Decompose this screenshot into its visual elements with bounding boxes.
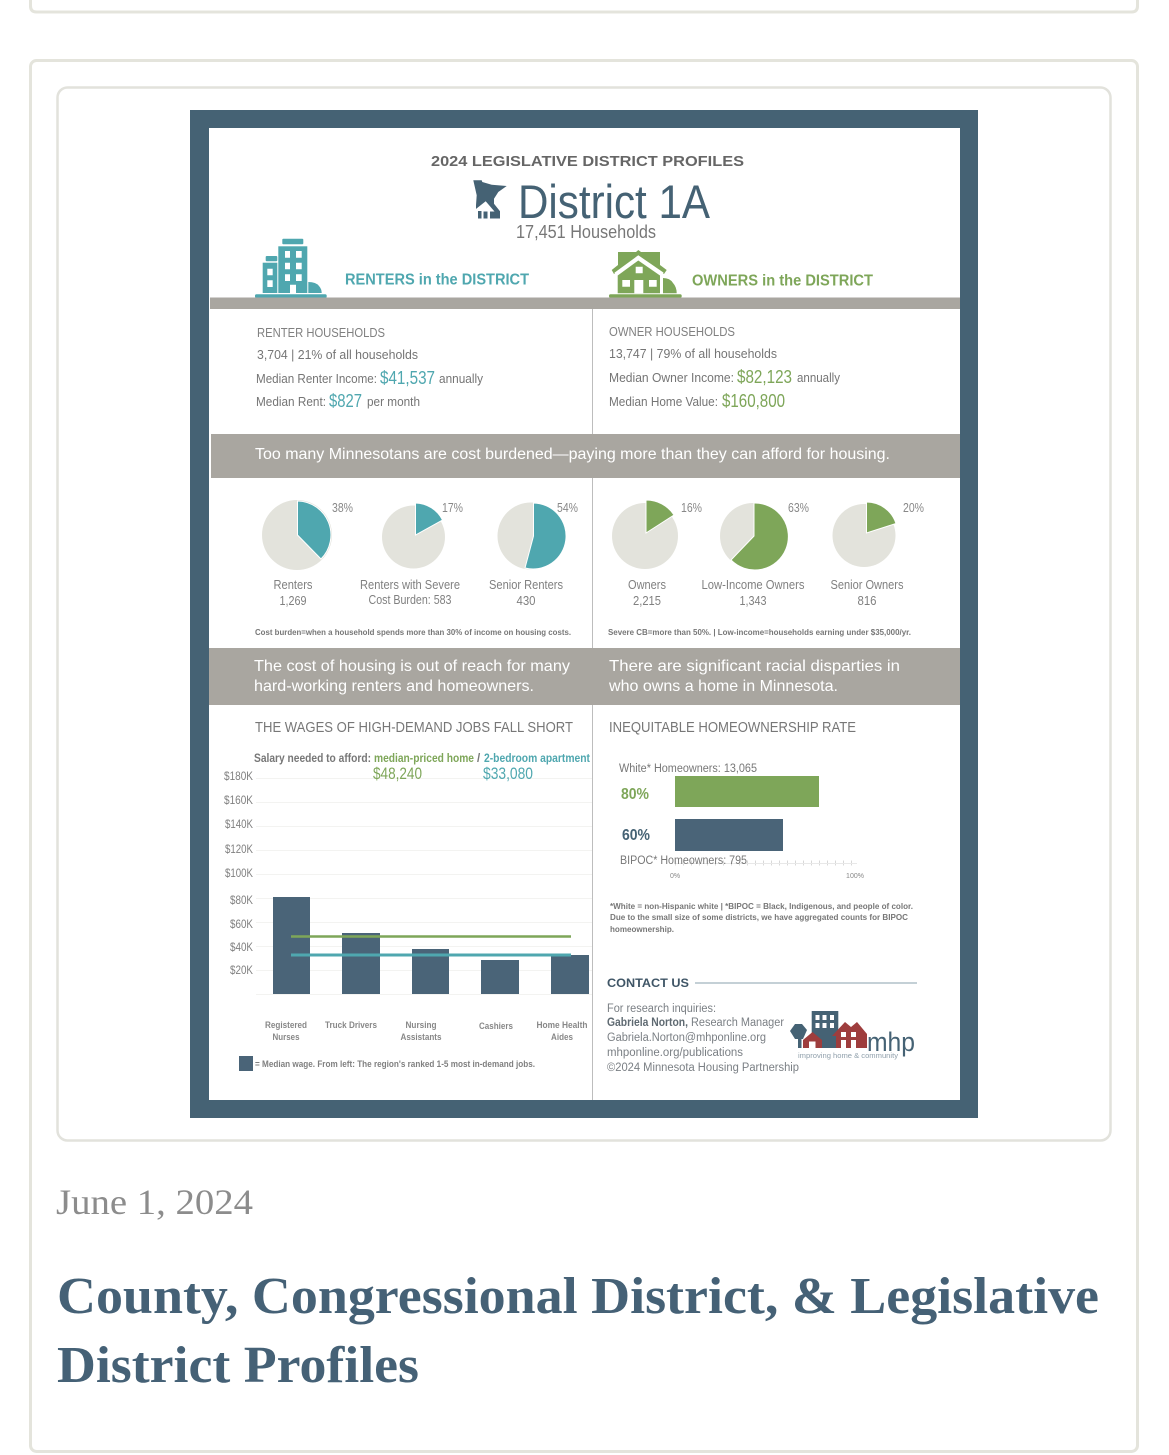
text block: renter households: Median Renter Income: <box>256 371 377 386</box>
pie chart: renters 38%: 1,269 <box>280 593 306 608</box>
chart legend: salary needed <box>254 753 590 783</box>
text block: owner households: $82,123 <box>737 367 792 387</box>
panel: image frame <box>58 88 1110 1140</box>
text block: renter households <box>256 325 483 411</box>
text block: owner households: 13,747 | 79% of all households <box>609 346 777 361</box>
bar chart: wages of high-demand jobs: Home Health <box>536 1020 588 1031</box>
text block: owner households: annually <box>797 370 840 385</box>
bar chart: wages of high-demand jobs: $140K <box>225 817 253 831</box>
contact section: Research Manager <box>691 1017 784 1029</box>
contact section: mhponline.org/publications <box>607 1047 743 1059</box>
bar chart: homeownership rate: 0% <box>670 873 680 880</box>
text block: renter households: annually <box>439 371 483 386</box>
pie chart: owners 16%: 16% <box>681 501 702 515</box>
pie chart: owners 16%: 2,215 <box>633 593 661 608</box>
contact section <box>607 976 917 1074</box>
footnote: cost burden: Cost burden=when a household spends more than 30% of income on housing costs. <box>255 628 571 637</box>
pie chart: owners 16% <box>612 500 702 608</box>
banner: cost of housing and disparities: hard-working renters and homeowners. <box>254 678 534 695</box>
bar chart: wages of high-demand jobs: Truck Drivers <box>325 1020 377 1031</box>
text block: renter households: Median Rent: <box>256 394 326 409</box>
page title: District Profiles <box>57 1337 419 1394</box>
bar chart: wages of high-demand jobs: $80K <box>230 893 253 907</box>
bar chart: wages of high-demand jobs: $40K <box>230 940 253 954</box>
pie chart: senior owners 20%: 20% <box>903 501 924 515</box>
chart legend: salary needed: $48,240 <box>373 765 422 783</box>
bar chart: homeownership rate: White* Homeowners: 13,065 <box>619 763 757 775</box>
chart legend: salary needed: 2-bedroom apartment <box>484 753 590 765</box>
footnote: race definitions: Due to the small size of some districts, we have aggregated counts for BIPOC <box>610 913 908 922</box>
pie chart: senior renters 54% <box>489 501 578 608</box>
legend: median wage <box>239 1056 535 1071</box>
pie chart: renters 38%: 38% <box>332 501 353 515</box>
bar chart: homeownership rate: 80% <box>621 786 649 803</box>
renters heading: RENTERS in the DISTRICT <box>345 272 529 288</box>
pie chart: owners 16%: Owners <box>628 577 666 592</box>
chart legend: salary needed: $33,080 <box>483 765 533 783</box>
icon: house <box>609 250 682 298</box>
footnote: race definitions: *White = non-Hispanic white | *BIPOC = Black, Indigenous, and people of color. <box>610 902 913 911</box>
banner: cost of housing and disparities: There are significant racial disparties in <box>609 658 900 675</box>
pie chart: low-income owners 63%: 1,343 <box>740 593 766 608</box>
bar chart: wages of high-demand jobs: Nurses <box>272 1032 300 1043</box>
bar chart: homeownership rate <box>619 763 864 880</box>
bar chart: wages of high-demand jobs: $100K <box>225 866 253 880</box>
bar chart: wages of high-demand jobs: $180K <box>224 769 253 783</box>
bar chart: wages of high-demand jobs: $20K <box>230 963 253 977</box>
pie chart: senior owners 20%: 816 <box>858 593 876 608</box>
pie chart: low-income owners 63%: Low-Income Owners <box>702 577 805 592</box>
panel: infographic poster <box>190 110 978 1118</box>
contact section: Gabriela.Norton@mhponline.org <box>607 1032 766 1044</box>
contact section: Gabriela Norton, <box>607 1017 688 1029</box>
bar chart: wages of high-demand jobs: $160K <box>224 793 253 807</box>
bar chart: wages of high-demand jobs: Nursing <box>406 1020 437 1031</box>
pie chart: severe cost burden 17%: Renters with Severe <box>360 577 460 592</box>
footnote: severe cost burden: Severe CB=more than 50%. | Low-income=households earning under $35,000/yr. <box>608 628 911 637</box>
contact section: CONTACT US <box>607 976 689 990</box>
icon: apartment building <box>255 239 327 298</box>
contact section: For research inquiries: <box>607 1003 716 1015</box>
bar chart: homeownership rate: 60% <box>622 827 650 844</box>
bar chart: wages of high-demand jobs: $120K <box>225 842 253 856</box>
footnote: race definitions: homeownership. <box>610 925 674 934</box>
icon: Minnesota state with house <box>473 180 507 218</box>
pie chart: senior renters 54%: 430 <box>516 593 536 608</box>
text block: renter households: per month <box>367 394 420 409</box>
chart legend: salary needed: median-priced home <box>374 753 474 765</box>
heading: homeownership chart: INEQUITABLE HOMEOWNERSHIP RATE <box>609 720 856 736</box>
pie chart: senior renters 54%: 54% <box>557 501 578 515</box>
bar chart: homeownership rate: 100% <box>846 873 864 880</box>
text block: renter households: 3,704 | 21% of all households <box>257 347 418 362</box>
text block: owner households <box>609 324 840 411</box>
district title: District 1A <box>518 175 711 228</box>
logo: mhp <box>790 1011 915 1060</box>
pie chart: low-income owners 63% <box>702 501 809 608</box>
bar chart: wages of high-demand jobs: Cashiers <box>479 1021 513 1032</box>
pie chart: senior owners 20%: Senior Owners <box>830 577 904 592</box>
banner: cost of housing and disparities: The cost of housing is out of reach for many <box>254 658 570 675</box>
banner: cost burden <box>211 434 960 478</box>
logo: mhp: improving home & community <box>798 1053 899 1060</box>
pie chart: senior owners 20% <box>830 501 924 608</box>
bar chart: homeownership rate: BIPOC* Homeowners: 795 <box>620 855 747 867</box>
text block: renter households: $41,537 <box>380 368 435 388</box>
text block: owner households: Median Home Value: <box>609 394 718 409</box>
bar chart: wages of high-demand jobs: Registered <box>265 1020 307 1031</box>
owners heading: OWNERS in the DISTRICT <box>692 272 873 290</box>
page title <box>57 1268 1099 1394</box>
text block: renter households: $827 <box>329 391 362 411</box>
pie chart: low-income owners 63%: 63% <box>788 501 809 515</box>
banner: cost of housing and disparities <box>209 648 960 705</box>
banner: cost of housing and disparities: who owns a home in Minnesota. <box>608 678 838 695</box>
bar chart: wages of high-demand jobs <box>224 769 592 1043</box>
page title: County, Congressional District, & Legislative <box>57 1268 1099 1325</box>
footnote: race definitions <box>610 902 913 934</box>
text block: owner households: OWNER HOUSEHOLDS <box>609 324 735 339</box>
band divider under headings <box>210 298 960 309</box>
logo: mhp: mhp <box>867 1027 915 1057</box>
pie chart: senior renters 54%: Senior Renters <box>489 577 563 592</box>
legend: median wage: = Median wage. From left: The region's ranked 1-5 most in-demand jobs. <box>255 1059 535 1070</box>
heading: wages chart: THE WAGES OF HIGH-DEMAND JOBS FALL SHORT <box>255 720 573 736</box>
pie chart: renters 38% <box>262 500 353 608</box>
banner: cost burden: Too many Minnesotans are cost burdened—paying more than they can afford for housing. <box>255 446 890 463</box>
chart legend: salary needed: Salary needed to afford: <box>254 753 371 765</box>
bar chart: wages of high-demand jobs: Aides <box>551 1032 573 1043</box>
pie chart: severe cost burden 17%: 17% <box>442 501 463 515</box>
text block: renter households: RENTER HOUSEHOLDS <box>257 325 385 340</box>
chart legend: salary needed: / <box>477 753 481 765</box>
pie chart: renters 38%: Renters <box>274 577 313 592</box>
household count: 17,451 Households <box>516 222 656 242</box>
text block: owner households: $160,800 <box>722 391 785 411</box>
bar chart: wages of high-demand jobs: $60K <box>230 917 253 931</box>
pie chart: severe cost burden 17%: Cost Burden: 583 <box>368 592 452 607</box>
previous card edge <box>30 0 1138 12</box>
text block: owner households: Median Owner Income: <box>609 370 734 385</box>
date: June 1, 2024 <box>56 1182 253 1222</box>
pie chart: severe cost burden 17% <box>360 501 463 607</box>
poster kicker: 2024 LEGISLATIVE DISTRICT PROFILES <box>431 154 744 170</box>
contact section: ©2024 Minnesota Housing Partnership <box>607 1062 799 1074</box>
bar chart: wages of high-demand jobs: Assistants <box>400 1032 442 1043</box>
